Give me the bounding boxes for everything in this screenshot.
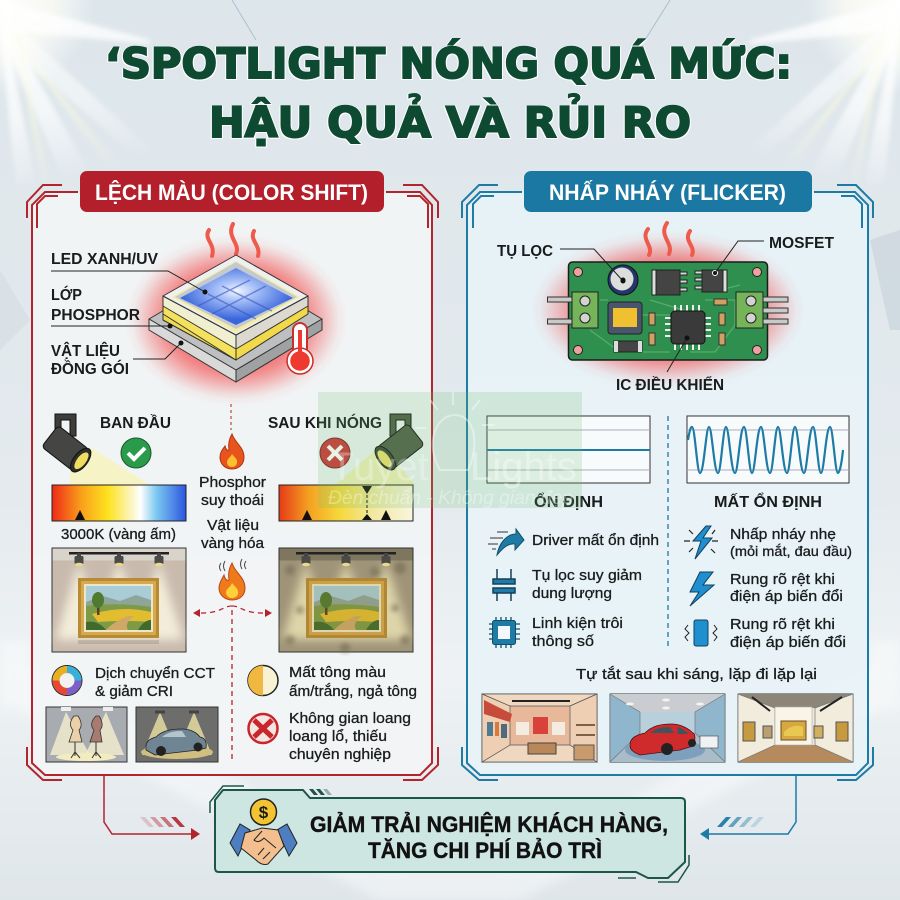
icon: bolt bbox=[690, 572, 714, 606]
image: gallery after heating bbox=[279, 548, 413, 653]
text: patchy space: Không gian loang bbox=[289, 710, 411, 727]
panel: lệch màu bbox=[27, 171, 438, 780]
icon: vibrating phone bbox=[685, 620, 717, 646]
icon: coin: $ bbox=[259, 803, 269, 822]
callout text bbox=[310, 812, 668, 863]
icon: red cross circle bbox=[248, 714, 278, 743]
image: gallery initial bbox=[52, 548, 186, 652]
labels: LED layers: ĐỒNG GÓI bbox=[51, 359, 129, 378]
text: visible vibration 1 bbox=[730, 571, 843, 605]
text: components drift: thông số bbox=[532, 633, 595, 650]
text: light flicker bbox=[730, 526, 852, 559]
panel heading bbox=[524, 171, 812, 212]
title: ‘SPOTLIGHT NÓNG QUÁ MỨC: bbox=[105, 38, 792, 88]
text: tone loss: ấm/trắng, ngả tông bbox=[289, 683, 417, 700]
text: phosphor degradation: Vật liệu bbox=[207, 517, 259, 534]
labels: LED layers bbox=[51, 251, 208, 378]
text: visible vibration 1: Rung rõ rệt khi bbox=[730, 571, 835, 588]
icon: half tone circle bbox=[248, 666, 278, 696]
text: cct shift bbox=[95, 665, 215, 700]
text: tone loss: Mất tông màu bbox=[289, 664, 386, 681]
result callout bbox=[210, 786, 689, 882]
watermark: Lights bbox=[470, 445, 577, 489]
beam: right spotlight bbox=[335, 448, 415, 485]
labels: LED layers: PHOSPHOR bbox=[51, 307, 140, 324]
heading: ổn định: ỔN ĐỊNH bbox=[534, 492, 603, 511]
component: resistors bbox=[649, 299, 727, 345]
icon: handshake bbox=[230, 824, 297, 864]
labels: LED layers: LED XANH/UV bbox=[51, 251, 158, 268]
panel heading: NHẤP NHÁY (FLICKER) bbox=[549, 180, 786, 205]
labels: circuit parts bbox=[497, 235, 834, 394]
panel: nhấp nháy bbox=[462, 171, 873, 780]
component: diode bbox=[614, 341, 642, 352]
text: phosphor degradation: suy thoái bbox=[201, 492, 264, 509]
labels: circuit parts: MOSFET bbox=[769, 235, 834, 252]
image: store bbox=[482, 694, 597, 762]
title bbox=[105, 38, 792, 147]
labels: LED layers: VẬT LIỆU bbox=[51, 341, 120, 360]
callout text: TĂNG CHI PHÍ BẢO TRÌ bbox=[368, 838, 602, 863]
wires and terminals bbox=[548, 292, 788, 328]
panel heading bbox=[80, 171, 384, 212]
text: components drift: Linh kiện trôi bbox=[532, 615, 623, 632]
text: cct shift: Dịch chuyển CCT bbox=[95, 665, 215, 682]
icon: flicker bolt bbox=[684, 526, 718, 559]
icon: driver arrow bbox=[488, 529, 524, 555]
text: capacitor decline bbox=[532, 567, 642, 602]
icon: check bbox=[121, 438, 151, 468]
icon: color wheel bbox=[52, 665, 82, 696]
image: car showroom bbox=[610, 694, 725, 762]
chart: spectrum initial bbox=[52, 485, 186, 543]
image: art gallery bbox=[738, 694, 853, 762]
icon: cross bbox=[320, 438, 350, 468]
panel frame: blue bbox=[462, 185, 873, 780]
divider: center top bbox=[230, 404, 232, 430]
watermark: Đèn chuẩn - Không gian đẹp bbox=[328, 488, 573, 509]
callout box bbox=[215, 790, 685, 878]
text: visible vibration 1: điện áp biến đổi bbox=[730, 588, 843, 605]
image: car showroom dim bbox=[136, 707, 218, 762]
labels: circuit parts: IC ĐIỀU KHIỂN bbox=[616, 375, 724, 394]
icon: spotlight initial bbox=[41, 414, 95, 475]
panel heading: LỆCH MÀU (COLOR SHIFT) bbox=[95, 180, 368, 205]
component: inductor bbox=[608, 302, 642, 334]
text: light flicker: (mỏi mắt, đau đầu) bbox=[730, 543, 852, 559]
text: capacitor decline: Tụ lọc suy giảm bbox=[532, 567, 642, 584]
icon: thermometer bbox=[287, 323, 313, 374]
diagram: driver circuit board bbox=[536, 223, 800, 384]
heading: ban đầu: BAN ĐẦU bbox=[100, 413, 171, 432]
icon: spotlight after heating bbox=[371, 414, 425, 473]
text: light flicker: Nhấp nháy nhẹ bbox=[730, 526, 836, 543]
icon: flame bbox=[220, 434, 244, 469]
image: mannequins bbox=[46, 707, 127, 762]
text: patchy space: loang lổ, thiếu bbox=[289, 728, 387, 745]
chart: stable signal bbox=[487, 416, 650, 483]
watermark: Tuyet bbox=[330, 445, 429, 489]
text: phosphor degradation: Phosphor bbox=[199, 474, 266, 491]
text: phosphor degradation: vàng hóa bbox=[201, 535, 265, 552]
arrows: dashed flame to galleries bbox=[193, 606, 272, 762]
divider: center dashed bbox=[667, 416, 669, 650]
chart: spectrum after heating bbox=[279, 485, 413, 521]
heading: mất ổn định: MẤT ỔN ĐỊNH bbox=[714, 492, 822, 511]
callout text: GIẢM TRẢI NGHIỆM KHÁCH HÀNG, bbox=[310, 812, 668, 837]
text: visible vibration 2: Rung rõ rệt khi bbox=[730, 616, 835, 633]
component: controller IC bbox=[665, 305, 711, 350]
diagram: LED package layers bbox=[130, 224, 342, 400]
text: visible vibration 2: điện áp biến đổi bbox=[730, 634, 846, 651]
heading: sau khi nóng: SAU KHI NÓNG bbox=[268, 413, 382, 432]
arrow: left panel to result bbox=[104, 775, 200, 840]
text: auto shutoff: Tự tắt sau khi sáng, lặp đi lặp lại bbox=[576, 666, 817, 683]
beam: left spotlight bbox=[70, 448, 150, 485]
arrow: right panel to result bbox=[700, 775, 796, 840]
text: capacitor decline: dung lượng bbox=[532, 585, 612, 602]
component: capacitor bbox=[608, 265, 638, 295]
icon: chip bbox=[489, 617, 520, 648]
watermark bbox=[318, 392, 582, 509]
icon: capacitor symbol bbox=[493, 569, 515, 601]
chart: spectrum initial: 3000K (vàng ấm) bbox=[61, 526, 176, 543]
text: patchy space bbox=[289, 710, 411, 763]
text: phosphor degradation bbox=[199, 474, 266, 552]
title: HẬU QUẢ VÀ RỦI RO bbox=[209, 93, 691, 147]
text: components drift bbox=[532, 615, 623, 650]
text: driver: Driver mất ổn định bbox=[532, 532, 659, 549]
text: tone loss bbox=[289, 664, 417, 700]
icon: flame with heat bbox=[219, 559, 246, 600]
chart: unstable signal bbox=[687, 416, 849, 483]
text: visible vibration 2 bbox=[730, 616, 846, 651]
text: cct shift: & giảm CRI bbox=[95, 683, 173, 700]
icon: coin bbox=[250, 799, 276, 825]
labels: LED layers: LỚP bbox=[51, 285, 82, 304]
panel frame: red bbox=[27, 185, 438, 780]
component: transistors bbox=[652, 270, 727, 295]
text: patchy space: chuyên nghiệp bbox=[289, 746, 391, 763]
labels: circuit parts: TỤ LỌC bbox=[497, 243, 553, 260]
